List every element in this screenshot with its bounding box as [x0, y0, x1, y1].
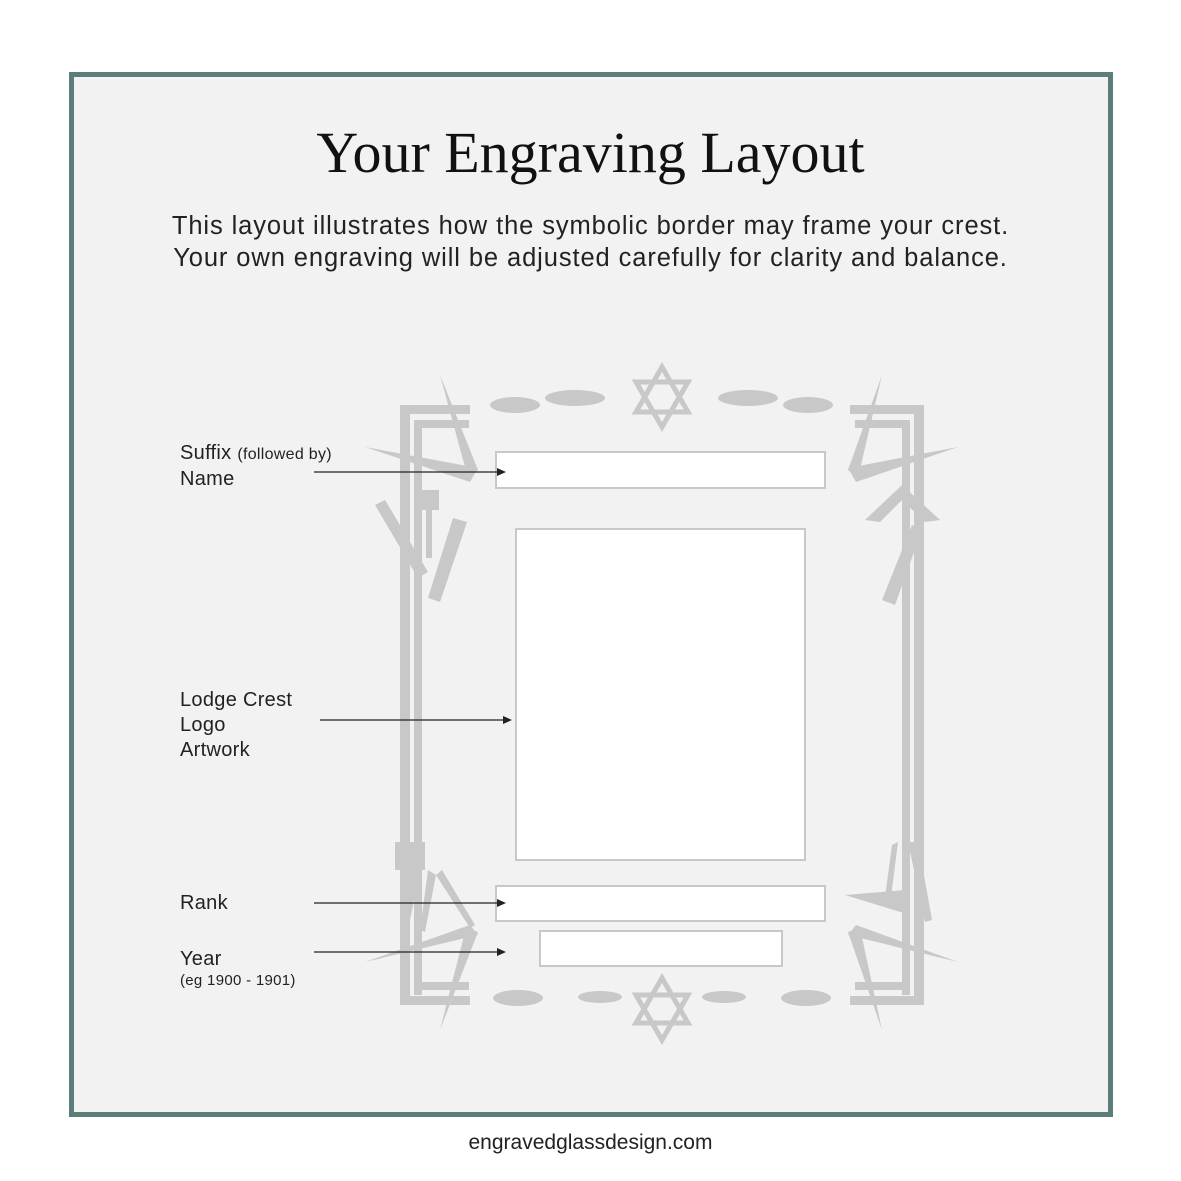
- panel: framed background: [69, 72, 1113, 1117]
- box: rank: [495, 885, 826, 922]
- label: rank: Rank: [180, 892, 228, 914]
- label: year: (eg 1900 - 1901): [180, 972, 296, 989]
- subtitle text: This layout illustrates how the symbolic border may frame your crest.: [172, 212, 1009, 240]
- label: lodge crest: [180, 689, 292, 761]
- label: lodge crest: Logo: [180, 714, 226, 736]
- title: Your Engraving Layout: [316, 120, 865, 185]
- subtitle text: Your own engraving will be adjusted carefully for clarity and balance.: [173, 244, 1008, 272]
- box: name: [495, 451, 826, 489]
- label: year: [180, 948, 296, 989]
- label: lodge crest: Lodge Crest: [180, 689, 292, 711]
- label: year: Year: [180, 948, 222, 970]
- subtitle text: [172, 212, 1009, 272]
- box: year: [539, 930, 783, 967]
- label: suffix name: Suffix (followed by): [180, 442, 332, 464]
- label: suffix name: [180, 442, 332, 490]
- box: crest: [515, 528, 806, 861]
- label: lodge crest: Artwork: [180, 739, 250, 761]
- label: suffix name: Name: [180, 468, 235, 490]
- footer url: engravedglassdesign.com: [468, 1131, 712, 1154]
